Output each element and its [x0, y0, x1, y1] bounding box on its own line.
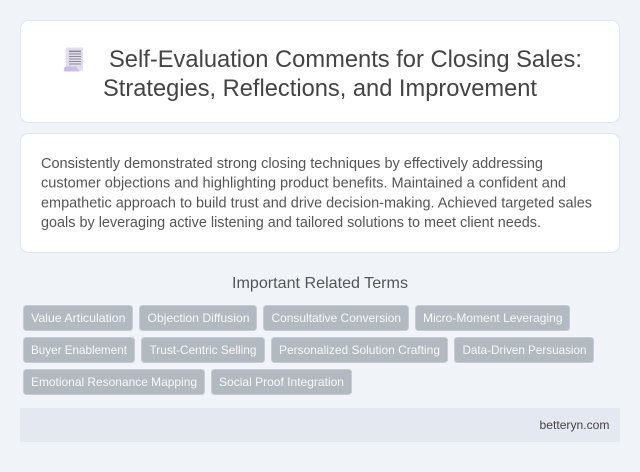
- tag: Value Articulation: [24, 306, 132, 330]
- tag: Buyer Enablement: [24, 338, 134, 362]
- tag: Personalized Solution Crafting: [272, 338, 448, 362]
- tag: Emotional Resonance Mapping: Emotional Resonance Mapping: [31, 375, 197, 389]
- tag: Emotional Resonance Mapping: [24, 370, 204, 394]
- tag: Trust-Centric Selling: [142, 338, 264, 362]
- tag: Micro-Moment Leveraging: Micro-Moment Leveraging: [423, 311, 562, 325]
- tag: Buyer Enablement: Buyer Enablement: [31, 343, 128, 357]
- body line 2: customer objections and highlighting product benefits. Maintained a confident and: [41, 176, 566, 192]
- tag: Data-Driven Persuasion: Data-Driven Persuasion: [462, 343, 586, 357]
- icon: document scroll: [64, 48, 83, 72]
- panel: title card: [20, 20, 620, 122]
- body line 4: goals by leveraging active listening and tailored solutions to meet client needs.: [41, 215, 541, 231]
- footer bar: [20, 408, 620, 442]
- tag: Objection Diffusion: [140, 306, 256, 330]
- tag: Consultative Conversion: [264, 306, 408, 330]
- body line 3: empathetic approach to build trust and drive decision-making. Achieved targeted sales: [41, 196, 592, 212]
- tag: Social Proof Integration: Social Proof Integration: [219, 375, 344, 389]
- tag: Data-Driven Persuasion: [454, 338, 594, 362]
- body line 1: Consistently demonstrated strong closing techniques by effectively addressing: [41, 156, 543, 172]
- tag: Trust-Centric Selling: Trust-Centric Selling: [150, 343, 256, 357]
- tag: Personalized Solution Crafting: Personalized Solution Crafting: [279, 343, 440, 357]
- heading: related terms: Important Related Terms: [232, 275, 408, 292]
- tag group: related terms: [24, 306, 594, 394]
- tag: Micro-Moment Leveraging: [416, 306, 570, 330]
- title line 1: Self-Evaluation Comments for Closing Sales:: [109, 46, 582, 73]
- tag: Social Proof Integration: [212, 370, 352, 394]
- title line 2: Strategies, Reflections, and Improvement: [103, 75, 537, 102]
- footer credit: betteryn.com: [540, 418, 610, 432]
- tag: Objection Diffusion: Objection Diffusion: [148, 311, 250, 325]
- tag: Consultative Conversion: Consultative Conversion: [272, 311, 401, 325]
- tag: Value Articulation: Value Articulation: [31, 311, 126, 325]
- panel: summary card: [20, 134, 620, 252]
